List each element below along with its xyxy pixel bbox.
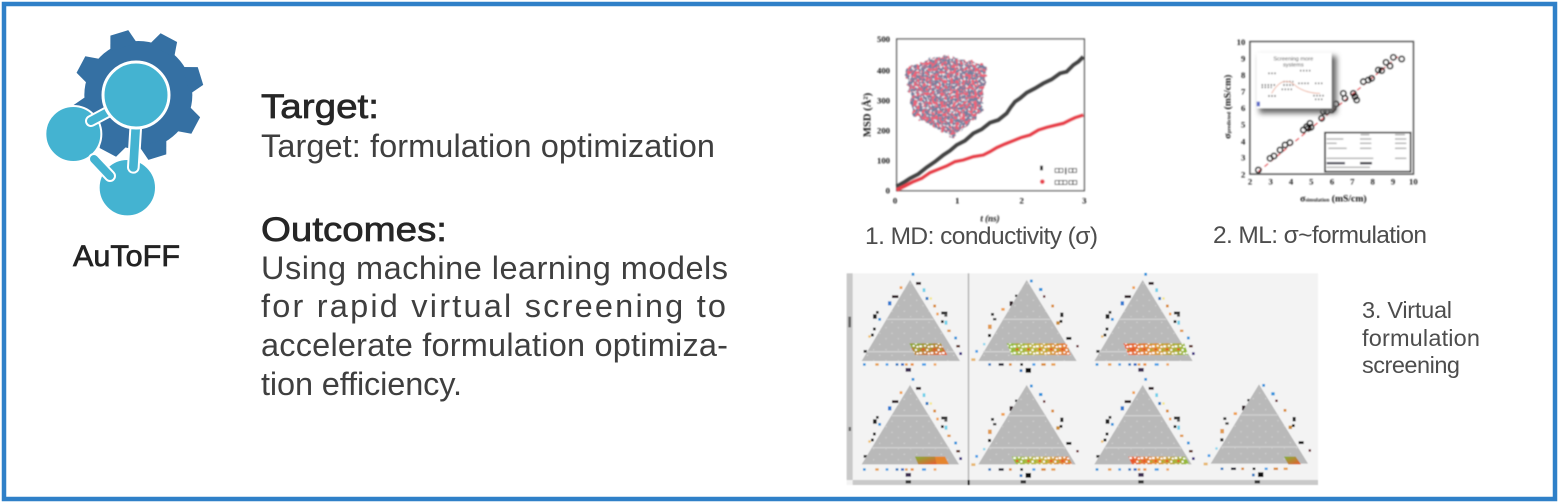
x tick labels: 0: [893, 195, 897, 205]
chart: MSD vs time: [862, 34, 1087, 223]
red MSD curve: [897, 115, 1083, 190]
tick labels: 8: [1371, 177, 1376, 187]
chart: predicted vs simulated conductivity: [1223, 37, 1418, 204]
outcomes description: Using machine learning models: [261, 250, 728, 286]
axis titles: σpredicted (mS/cm): [1223, 75, 1234, 139]
axis titles: MSD (Å²): [862, 92, 874, 137]
tick labels: 7: [1350, 177, 1355, 187]
molecular simulation cube: [905, 55, 987, 138]
y tick labels: 200: [877, 126, 890, 136]
y tick labels: 500: [877, 34, 890, 44]
chart: predicted vs simulated conductivity: 10: [1237, 37, 1245, 47]
chart: predicted vs simulated conductivity: 2: [1241, 169, 1245, 179]
data points: [1256, 55, 1404, 173]
chart: predicted vs simulated conductivity: 6: [1241, 103, 1246, 113]
ternary row 1, map 1: [862, 273, 962, 372]
outcomes description: [261, 250, 728, 402]
outcomes description: for rapid virtual screening to: [261, 288, 726, 324]
ternary row 2, map 3: [1094, 378, 1195, 477]
panel: ternary virtual screening maps: [847, 273, 1318, 485]
inset: statistics table: [1325, 133, 1411, 172]
tick labels: 9: [1391, 177, 1396, 187]
tick labels: 4: [1289, 177, 1294, 187]
chart: predicted vs simulated conductivity: σsimulation (mS/cm): [1300, 193, 1367, 204]
ternary row 2, map 2: [971, 385, 1079, 478]
outcomes description: tion efficiency.: [261, 366, 462, 402]
chart: predicted vs simulated conductivity: 9: [1241, 53, 1246, 63]
x tick labels: [893, 195, 1087, 205]
inset: sampling scatter plot: Screening more: [1273, 57, 1313, 63]
caption: virtual formulation screening: screening: [1362, 352, 1460, 378]
legend: [1040, 166, 1043, 170]
ternary row 2, map 4: [1204, 384, 1311, 477]
heading: Target: Target:: [261, 88, 379, 126]
inset: sampling scatter plot: systems: [1283, 63, 1304, 69]
caption: virtual formulation screening: 3. Virtual: [1362, 297, 1452, 323]
x tick labels: 3: [1082, 195, 1087, 205]
black MSD curve: [897, 57, 1083, 187]
tick labels: 5: [1309, 177, 1314, 187]
y tick labels: 0: [886, 186, 890, 196]
chart: predicted vs simulated conductivity: 4: [1241, 136, 1246, 146]
chart: MSD vs time: □□ | □□: [1055, 167, 1077, 174]
target description: Target: formulation optimization: [261, 128, 715, 164]
tick labels: 3: [1269, 177, 1274, 187]
y tick labels: 300: [877, 95, 890, 105]
tick labels: 10: [1409, 177, 1418, 187]
text block: target and outcomes: [261, 88, 728, 402]
y tick labels: 400: [877, 66, 890, 76]
chart: predicted vs simulated conductivity: 5: [1241, 120, 1246, 130]
inset: sampling scatter plot: [1257, 53, 1337, 113]
icon: AuToFF gear with molecule: [45, 29, 205, 216]
ternary row 1, map 2: [971, 280, 1079, 373]
chart: predicted vs simulated conductivity: 3: [1241, 153, 1246, 163]
heading: Outcomes: Outcomes:: [261, 211, 447, 249]
x tick labels: 1: [955, 195, 959, 205]
caption: MD: 1. MD: conductivity (σ): [865, 223, 1098, 250]
caption: virtual formulation screening: formulation: [1362, 325, 1480, 351]
chart: predicted vs simulated conductivity: 7: [1241, 87, 1246, 97]
red fit line: [1258, 55, 1400, 172]
y tick labels: [877, 34, 890, 196]
ternary row 2, map 1: [862, 378, 962, 477]
chart: predicted vs simulated conductivity: 8: [1241, 70, 1246, 80]
x tick labels: 2: [1020, 195, 1024, 205]
tick labels: 6: [1330, 177, 1335, 187]
y tick labels: 100: [877, 155, 890, 165]
outcomes description: accelerate formulation optimiza-: [261, 327, 728, 363]
tick labels: [1248, 177, 1418, 187]
tick labels: 2: [1248, 177, 1252, 187]
chart: MSD vs time: t (ns): [980, 213, 1000, 223]
caption: virtual formulation screening: [1362, 297, 1480, 378]
caption: ML: 2. ML: σ~formulation: [1213, 222, 1427, 249]
chart: MSD vs time: □□□ □□: [1055, 179, 1077, 186]
icon label: AuToFF: AuToFF: [73, 240, 180, 273]
ternary row 1, map 3: [1094, 273, 1195, 372]
